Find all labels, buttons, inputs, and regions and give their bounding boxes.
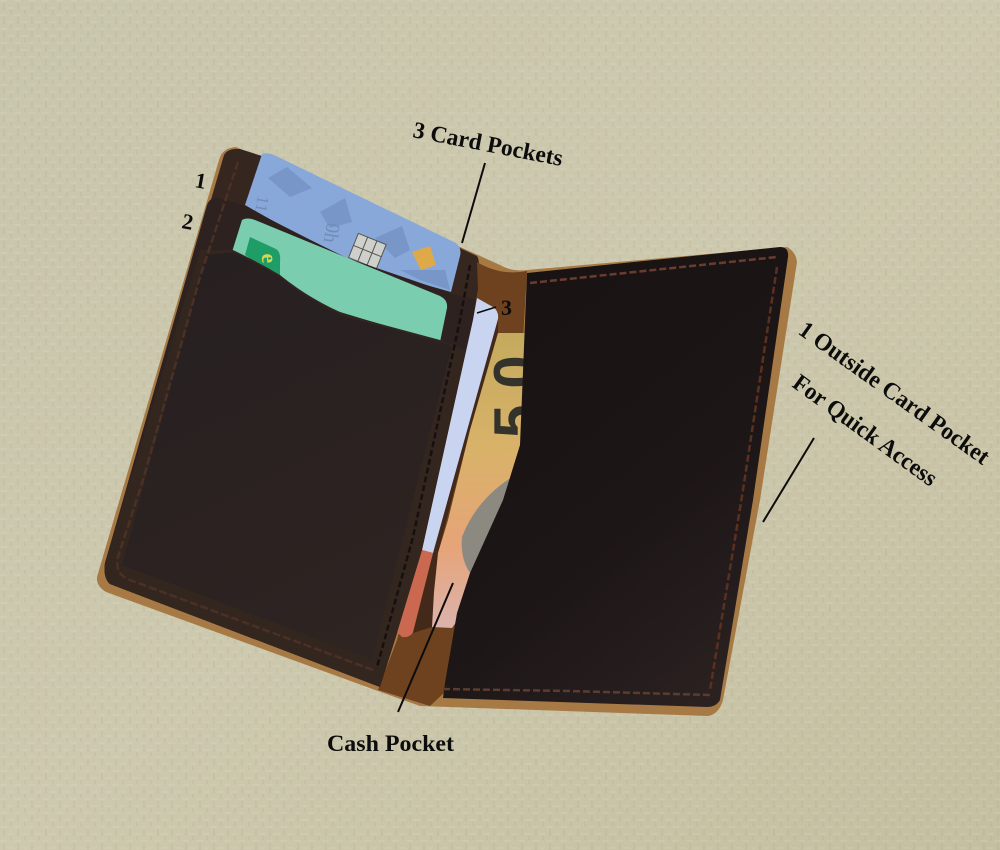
- wallet: [97, 147, 797, 716]
- card logo: [412, 246, 436, 270]
- dark strip between card and banknote: [413, 317, 498, 633]
- arrow: card pockets line: [462, 163, 485, 243]
- arrow: cash pocket line: [398, 583, 453, 712]
- banknote: 50: [482, 339, 549, 438]
- label: pocket number 2: 2: [180, 208, 195, 235]
- middle card pocket 2: [105, 198, 476, 687]
- arrow: pocket 3 line: [477, 307, 496, 313]
- label: pocket number 1: 1: [193, 167, 208, 194]
- banknote: [432, 333, 549, 628]
- tan centre spine: [378, 262, 527, 706]
- right outside card pocket panel: [443, 247, 788, 707]
- front card pocket: [105, 250, 466, 687]
- left panel stitching: [117, 162, 470, 670]
- label: Cash Pocket: Cash Pocket: [327, 731, 454, 757]
- blue card: [245, 153, 460, 292]
- label: 3 Card Pockets: 3 Card Pockets: [411, 117, 565, 172]
- arrow: outside pocket line: [763, 438, 814, 522]
- white card in pocket 3: [397, 298, 498, 637]
- blue card: 0h: [319, 221, 344, 245]
- label: For Quick Access: For Quick Access: [787, 370, 942, 492]
- card embossed numbers: 11 N: [248, 194, 273, 230]
- label: 1 Outside Card Pocket: 1 Outside Card Pocket: [794, 317, 994, 470]
- green card: e: [257, 252, 282, 264]
- back card pocket 1: [105, 149, 479, 687]
- card chip: [349, 233, 386, 269]
- green card: [232, 218, 447, 342]
- label: pocket number 3: 3: [501, 295, 512, 320]
- wallet tan leather edge: [97, 147, 797, 716]
